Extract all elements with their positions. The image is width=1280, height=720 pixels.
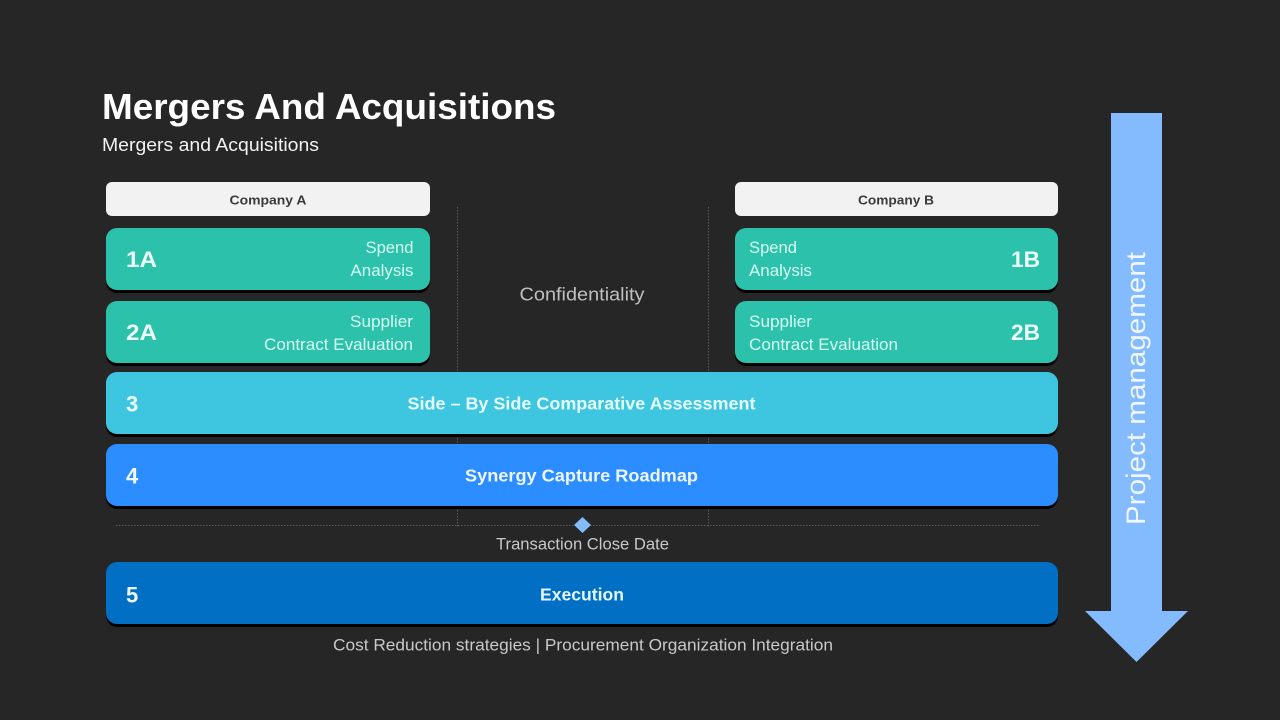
card: 2A Supplier Contract Evaluation: Contract Evaluation [264,335,413,354]
bar 3: Side-By-Side Comparative Assessment: 3 [126,392,138,416]
header: Company B: Company B [858,192,934,208]
header: Company A [106,182,430,216]
card: 2A Supplier Contract Evaluation: Supplier [350,312,413,331]
bar 4: Synergy Capture Roadmap [106,444,1058,509]
milestone diamond [574,517,591,533]
card: 2A Supplier Contract Evaluation [106,301,430,366]
card: 1B Spend Analysis: Spend [749,238,797,257]
bar 3: Side-By-Side Comparative Assessment [106,372,1058,437]
bar 5: Execution: Execution [540,584,624,604]
label: Confidentiality: Confidentiality [520,284,645,304]
card: 1B Spend Analysis: 1B [1011,247,1040,272]
subtitle: Mergers and Acquisitions [102,134,319,155]
card: 2B Supplier Contract Evaluation: Supplier [749,312,812,331]
card: 1A Spend Analysis [106,228,430,293]
bar 5: Execution: 5 [126,582,138,608]
card: 1B Spend Analysis: Analysis [749,261,812,280]
title: Mergers And Acquisitions [102,86,556,127]
card: 2B Supplier Contract Evaluation: 2B [1011,320,1040,345]
header: Company B [735,182,1058,216]
card: 1A Spend Analysis: 1A [126,247,157,272]
bar 3: Side-By-Side Comparative Assessment: Side – By Side Comparative Assessment [408,394,756,414]
card: 2A Supplier Contract Evaluation: 2A [126,320,157,345]
card: 1A Spend Analysis: Spend [366,238,414,257]
card: 1A Spend Analysis: Analysis [350,261,414,280]
header: Company A: Company A [230,192,307,208]
footer note: Cost Reduction strategies | Procurement Organization Integration [333,636,833,654]
arrow: Project management: Project management [1121,251,1151,525]
bar 4: Synergy Capture Roadmap: Synergy Capture Roadmap [465,466,698,486]
card: 2B Supplier Contract Evaluation: Contract Evaluation [749,335,898,354]
arrow: Project management [1085,113,1188,662]
label: Transaction Close Date: Transaction Close Date [496,534,669,554]
bar 5: Execution [106,562,1058,627]
bar 4: Synergy Capture Roadmap: 4 [126,464,139,488]
card: 1B Spend Analysis [735,228,1058,293]
card: 2B Supplier Contract Evaluation [735,301,1058,366]
